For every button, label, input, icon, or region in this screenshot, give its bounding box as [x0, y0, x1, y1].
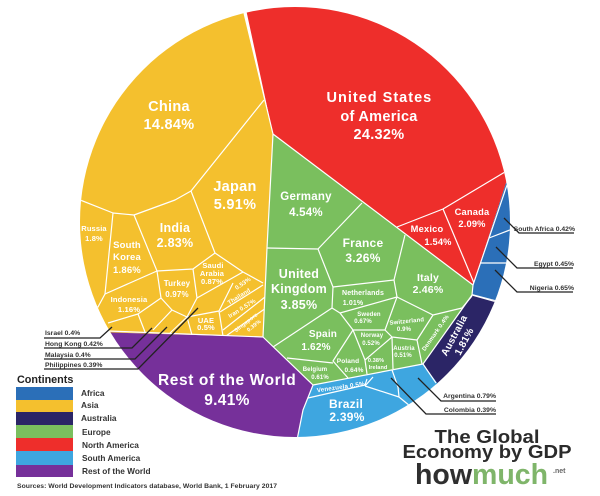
logo: howmuch.net: howmuch: [415, 459, 548, 491]
label: United Kingdom: Kingdom: [271, 282, 327, 296]
label: Brazil: [329, 397, 365, 424]
label: Ireland: Ireland: [369, 365, 387, 371]
callout labels: Malaysia 0.4%: [45, 352, 91, 359]
label: Austria: Austria: [393, 346, 415, 352]
country labels: [81, 90, 490, 424]
label: Rest of the World: Rest of the World: [158, 372, 296, 389]
label: Turkey: Turkey: [164, 279, 191, 288]
label: Indonesia: Indonesia: [111, 295, 148, 304]
label: Japan: 5.91%: [214, 197, 256, 213]
legend: continents: Rest of the World: [82, 466, 151, 476]
label: Ireland: 0.38%: [368, 358, 384, 364]
label: Austria: 0.51%: [394, 353, 412, 359]
label: Saudi Arabia: 0.87%: [201, 277, 223, 286]
label: Switzerland: [389, 317, 425, 333]
label: Singapore: 0.39%: [246, 319, 263, 334]
label: Japan: [213, 179, 257, 213]
label: Thailand: 0.53%: [234, 276, 253, 292]
label: Germany: Germany: [280, 191, 332, 203]
callout labels: Nigeria 0.65%: [530, 285, 574, 292]
region: Rest of the World: [110, 332, 312, 437]
title: Economy by GDP: [402, 442, 572, 462]
voronoi pie chart: [80, 7, 510, 437]
label: Netherlands: [342, 290, 384, 307]
label: Poland: Poland: [337, 358, 359, 365]
legend: continents: [16, 374, 151, 477]
label: Austria: [393, 346, 415, 359]
region: Africa: [472, 182, 510, 300]
callout labels: South Africa 0.42%: [514, 226, 575, 233]
label: Belgium: 0.61%: [311, 375, 329, 381]
leader lines: [44, 218, 574, 414]
label: Canada: 2.09%: [458, 219, 486, 229]
label: Poland: [337, 358, 364, 374]
label: Italy: Italy: [417, 272, 439, 284]
label: Russia: 1.8%: [85, 234, 103, 243]
label: China: 14.84%: [144, 117, 194, 133]
label: United States: 24.32%: [354, 127, 404, 143]
label: Thailand: Thailand: [227, 288, 252, 306]
label: Thailand: [227, 276, 253, 306]
label: Mexico: 1.54%: [424, 237, 452, 247]
label: UAE: UAE: [198, 316, 214, 325]
sources note: Sources: World Development Indicators database, World Bank, 1 February 2017: [17, 483, 277, 490]
callout labels: Israel 0.4%: [45, 330, 80, 337]
callout labels: [45, 226, 575, 414]
label: Indonesia: 1.16%: [118, 305, 140, 314]
label: India: 2.83%: [157, 236, 193, 250]
label: UAE: 0.5%: [197, 323, 215, 332]
label: Saudi Arabia: Arabia: [200, 269, 225, 278]
label: Netherlands: 1.01%: [343, 300, 364, 307]
label: India: India: [160, 221, 191, 235]
label: United Kingdom: [271, 267, 327, 312]
label: Germany: 4.54%: [289, 207, 323, 219]
label: Mexico: [411, 224, 452, 247]
label: South Korea: South: [113, 240, 141, 251]
label: South Korea: 1.86%: [113, 265, 141, 276]
label: South Korea: [113, 240, 141, 276]
region: Asia: [80, 13, 272, 336]
title: The Global: [434, 427, 540, 447]
label: Brazil: 2.39%: [329, 410, 365, 424]
label: Saudi Arabia: [200, 261, 225, 286]
legend: continents: Continents: [17, 374, 73, 386]
callout labels: Argentina 0.79%: [443, 393, 496, 400]
label: Belgium: [303, 367, 329, 381]
label: Norway: [361, 333, 384, 347]
label: South Korea: Korea: [113, 252, 141, 263]
label: Sweden: 0.67%: [354, 319, 372, 325]
label: Spain: Spain: [309, 329, 337, 340]
region: North America: [244, 0, 520, 285]
label: UAE: [197, 316, 215, 332]
label: Australia: 1.81%: [453, 326, 477, 357]
label: Brazil: Brazil: [329, 397, 363, 411]
legend: continents: Europe: [82, 427, 111, 437]
label: Singapore: Singapore: [234, 312, 259, 334]
label: France: France: [343, 236, 383, 250]
label: United States: of America: [340, 109, 418, 125]
label: Poland: 0.64%: [344, 367, 364, 374]
label: United Kingdom: United: [279, 267, 319, 281]
label: United States: United States: [326, 90, 432, 106]
label: Turkey: [164, 279, 191, 299]
label: Venezuela: Venezuela 0.5%: [316, 381, 365, 394]
callout labels: Egypt 0.45%: [534, 261, 574, 268]
label: India: [157, 221, 193, 250]
label: Russia: [81, 224, 107, 243]
region: Australia: [424, 296, 495, 384]
label: Russia: Russia: [81, 224, 107, 233]
label: Sweden: Sweden: [357, 312, 381, 318]
label: Saudi Arabia: Saudi: [202, 261, 224, 270]
label: Australia: Australia: [439, 313, 470, 358]
label: Turkey: 0.97%: [165, 290, 189, 299]
callout labels: Colombia 0.39%: [444, 407, 496, 414]
label: Belgium: Belgium: [303, 367, 327, 373]
legend: continents: South America: [82, 453, 141, 463]
logo: howmuch.net: .net: [553, 468, 566, 475]
label: France: [343, 236, 383, 265]
label: Sweden: [354, 312, 381, 325]
label: Rest of the World: 9.41%: [204, 392, 250, 409]
label: China: [144, 99, 194, 133]
label: Iran: Iran 0.57%: [228, 298, 258, 320]
callout labels: Hong Kong 0.42%: [45, 341, 103, 348]
label: Netherlands: Netherlands: [342, 290, 384, 297]
label: France: 3.26%: [345, 251, 381, 265]
label: Italy: 2.46%: [413, 284, 444, 296]
label: Japan: Japan: [213, 179, 257, 195]
label: United Kingdom: 3.85%: [281, 298, 317, 312]
callout labels: Philippines 0.39%: [45, 362, 102, 369]
label: Mexico: Mexico: [411, 224, 443, 234]
label: United States: [326, 90, 432, 143]
label: Denmark: Denmark 0.4%: [422, 314, 451, 353]
title: [402, 427, 572, 462]
label: Rest of the World: [158, 372, 296, 409]
label: Spain: [301, 329, 337, 353]
label: Canada: [455, 207, 490, 229]
region: Europe: [263, 134, 473, 385]
legend: continents: Africa: [81, 388, 105, 398]
label: Canada: Canada: [455, 207, 490, 217]
label: China: China: [148, 99, 191, 115]
label: Indonesia: [111, 295, 148, 314]
legend: continents: Asia: [81, 400, 99, 410]
label: Spain: 1.62%: [301, 342, 331, 353]
region: South America: [296, 364, 438, 437]
legend: continents: North America: [82, 440, 139, 450]
legend: continents: Australia: [81, 413, 117, 423]
label: Norway: 0.52%: [362, 341, 380, 347]
label: Norway: Norway: [361, 333, 384, 339]
label: Switzerland: Switzerland: [389, 317, 425, 327]
label: Italy: [413, 272, 444, 296]
label: Switzerland: 0.9%: [397, 327, 412, 333]
label: Germany: [280, 191, 332, 219]
label: Ireland: [368, 358, 387, 371]
